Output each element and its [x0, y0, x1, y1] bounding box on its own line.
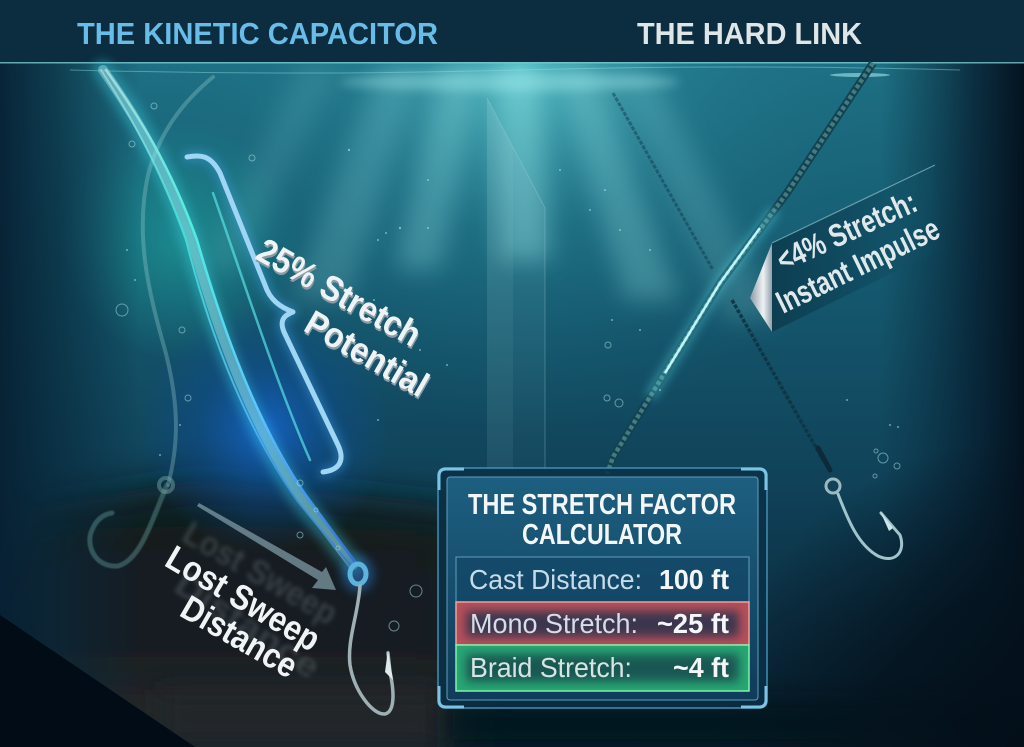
- row: cast distance: 100 ft: [659, 564, 729, 595]
- arrow: lost sweep direction: [197, 503, 336, 590]
- row: cast distance: [456, 557, 749, 602]
- water surface line: [0, 62, 1024, 91]
- panel heading: [468, 489, 736, 551]
- braided line, taut: [607, 63, 873, 474]
- row: mono stretch: [456, 602, 749, 645]
- title bar: [0, 0, 1024, 62]
- title: the hard link: THE HARD LINK: [637, 16, 863, 51]
- hook: braid line: [818, 448, 902, 559]
- label: lost sweep distance with motion ghost: Distance: [168, 565, 327, 687]
- label: lost sweep distance with motion ghost: Distance: [174, 588, 304, 686]
- row: braid stretch: Braid Stretch:: [470, 652, 632, 683]
- bracket: stretch span: [187, 156, 341, 472]
- panel: stretch factor calculator: [438, 468, 767, 708]
- label: 25% stretch potential: Potential: [298, 303, 435, 405]
- label: lost sweep distance with motion ghost: Lost Sweep: [176, 514, 344, 633]
- suspended particles: [126, 149, 899, 456]
- row: mono stretch: ~25 ft: [657, 608, 729, 639]
- row: braid stretch: ~4 ft: [673, 652, 729, 683]
- stretched mono line, glowing: [101, 70, 355, 566]
- faint relaxed mono line with ghost hook: [90, 77, 213, 566]
- callout: under 4 percent stretch: [750, 165, 945, 332]
- light rays from the water surface: [200, 66, 780, 320]
- faint braided line, slack: [613, 93, 823, 460]
- central glass divider: [487, 98, 545, 470]
- row: mono stretch: Mono Stretch:: [470, 608, 638, 639]
- label: 25% stretch potential: 25% Stretch: [250, 231, 428, 355]
- hook: mono line: [342, 556, 393, 714]
- panel heading: THE STRETCH FACTOR: [468, 489, 736, 521]
- row: braid stretch: [456, 645, 749, 691]
- panel frame: [438, 468, 767, 708]
- row: cast distance: Cast Distance:: [469, 564, 642, 595]
- callout: under 4 percent stretch: <4% Stretch:: [771, 183, 922, 278]
- panel heading: CALCULATOR: [522, 519, 682, 551]
- air bubbles: [116, 103, 900, 631]
- title: the kinetic capacitor: THE KINETIC CAPACITOR: [77, 16, 438, 51]
- callout: under 4 percent stretch: Instant Impulse: [770, 210, 945, 320]
- label: lost sweep distance with motion ghost: Lost Sweep: [159, 538, 327, 659]
